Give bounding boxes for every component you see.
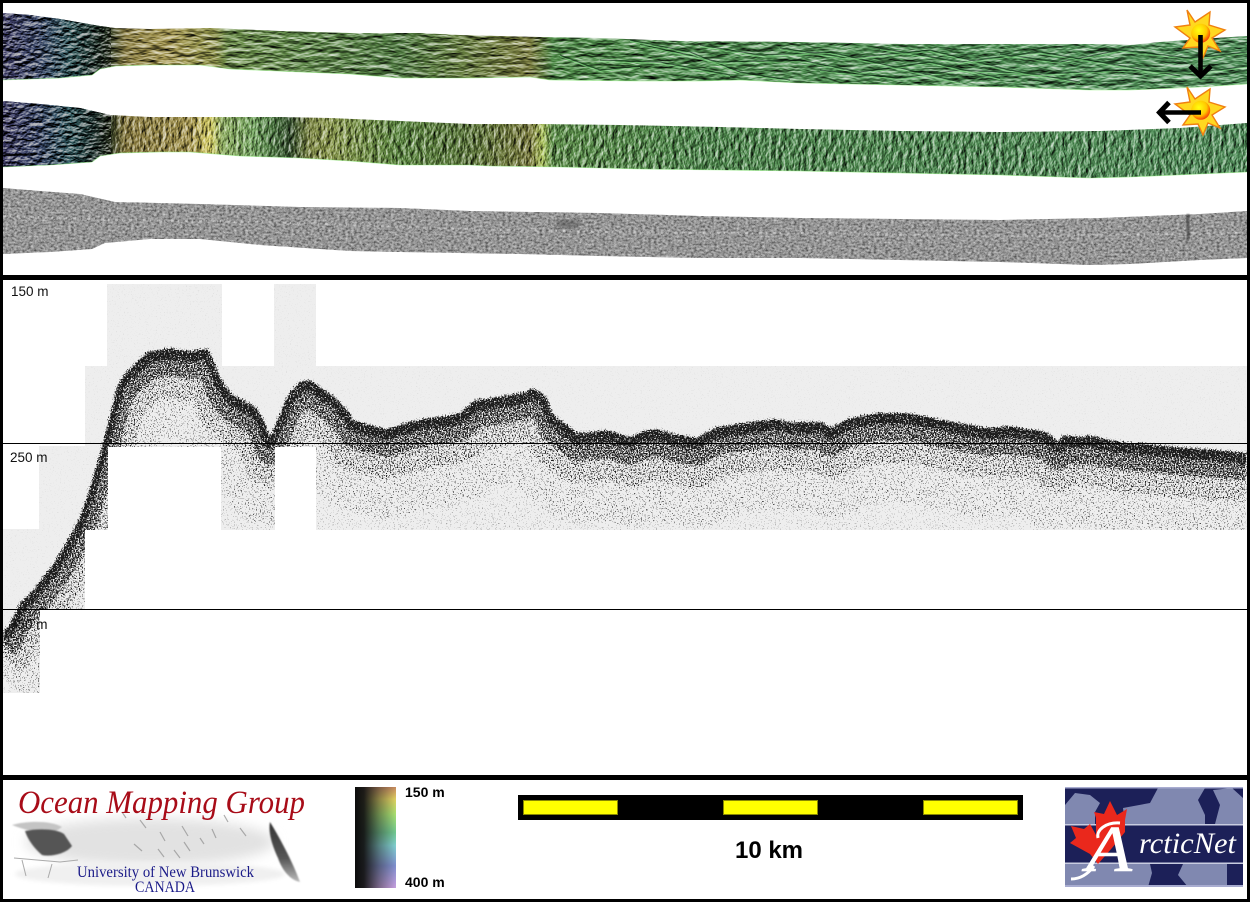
depth line 250 m [3, 443, 1247, 444]
logo: ArcticNet [1065, 787, 1243, 887]
logo: Ocean Mapping Group: Ocean Mapping Group [18, 785, 305, 821]
panel: sun-illuminated swaths and backscatter [0, 3, 1250, 275]
swath: grey backscatter [3, 188, 1247, 265]
label: 250 m: 250 m [10, 450, 48, 465]
swath: bathymetry lit from east [3, 101, 1247, 178]
profile acquisition windows [3, 284, 1247, 693]
icon: maple leaf [1070, 801, 1127, 864]
label: 400 m: 400 m [405, 874, 445, 890]
arrow: illumination direction south [1190, 35, 1211, 76]
logo: Ocean Mapping Group: CANADA [135, 879, 196, 896]
icon: sun, lower swath illumination [1175, 87, 1225, 135]
scale bar [518, 795, 1023, 864]
icon: sun, upper swath illumination [1175, 10, 1225, 58]
arrow: illumination direction west [1160, 102, 1201, 122]
depth line 350 m [3, 609, 1247, 610]
logo: Ocean Mapping Group: University of New Brunswick [77, 864, 254, 881]
label: 150 m: 150 m [11, 284, 49, 299]
panel: legend footer [3, 780, 1247, 899]
map land shapes [1065, 788, 1243, 887]
swath: bathymetry lit from north [3, 13, 1247, 90]
label: 150 m: 150 m [405, 784, 445, 800]
label: 10 km: 10 km [735, 837, 803, 864]
logo: Ocean Mapping Group [12, 785, 305, 896]
panel: sub-bottom profile [3, 280, 1247, 775]
logo: ArcticNet: A [1081, 813, 1133, 886]
logo: ArcticNet: rcticNet [1139, 827, 1237, 860]
label: 350 m: 350 m [10, 617, 48, 632]
profile: seabed echo stipple [3, 284, 1247, 693]
colour depth legend [355, 784, 445, 890]
